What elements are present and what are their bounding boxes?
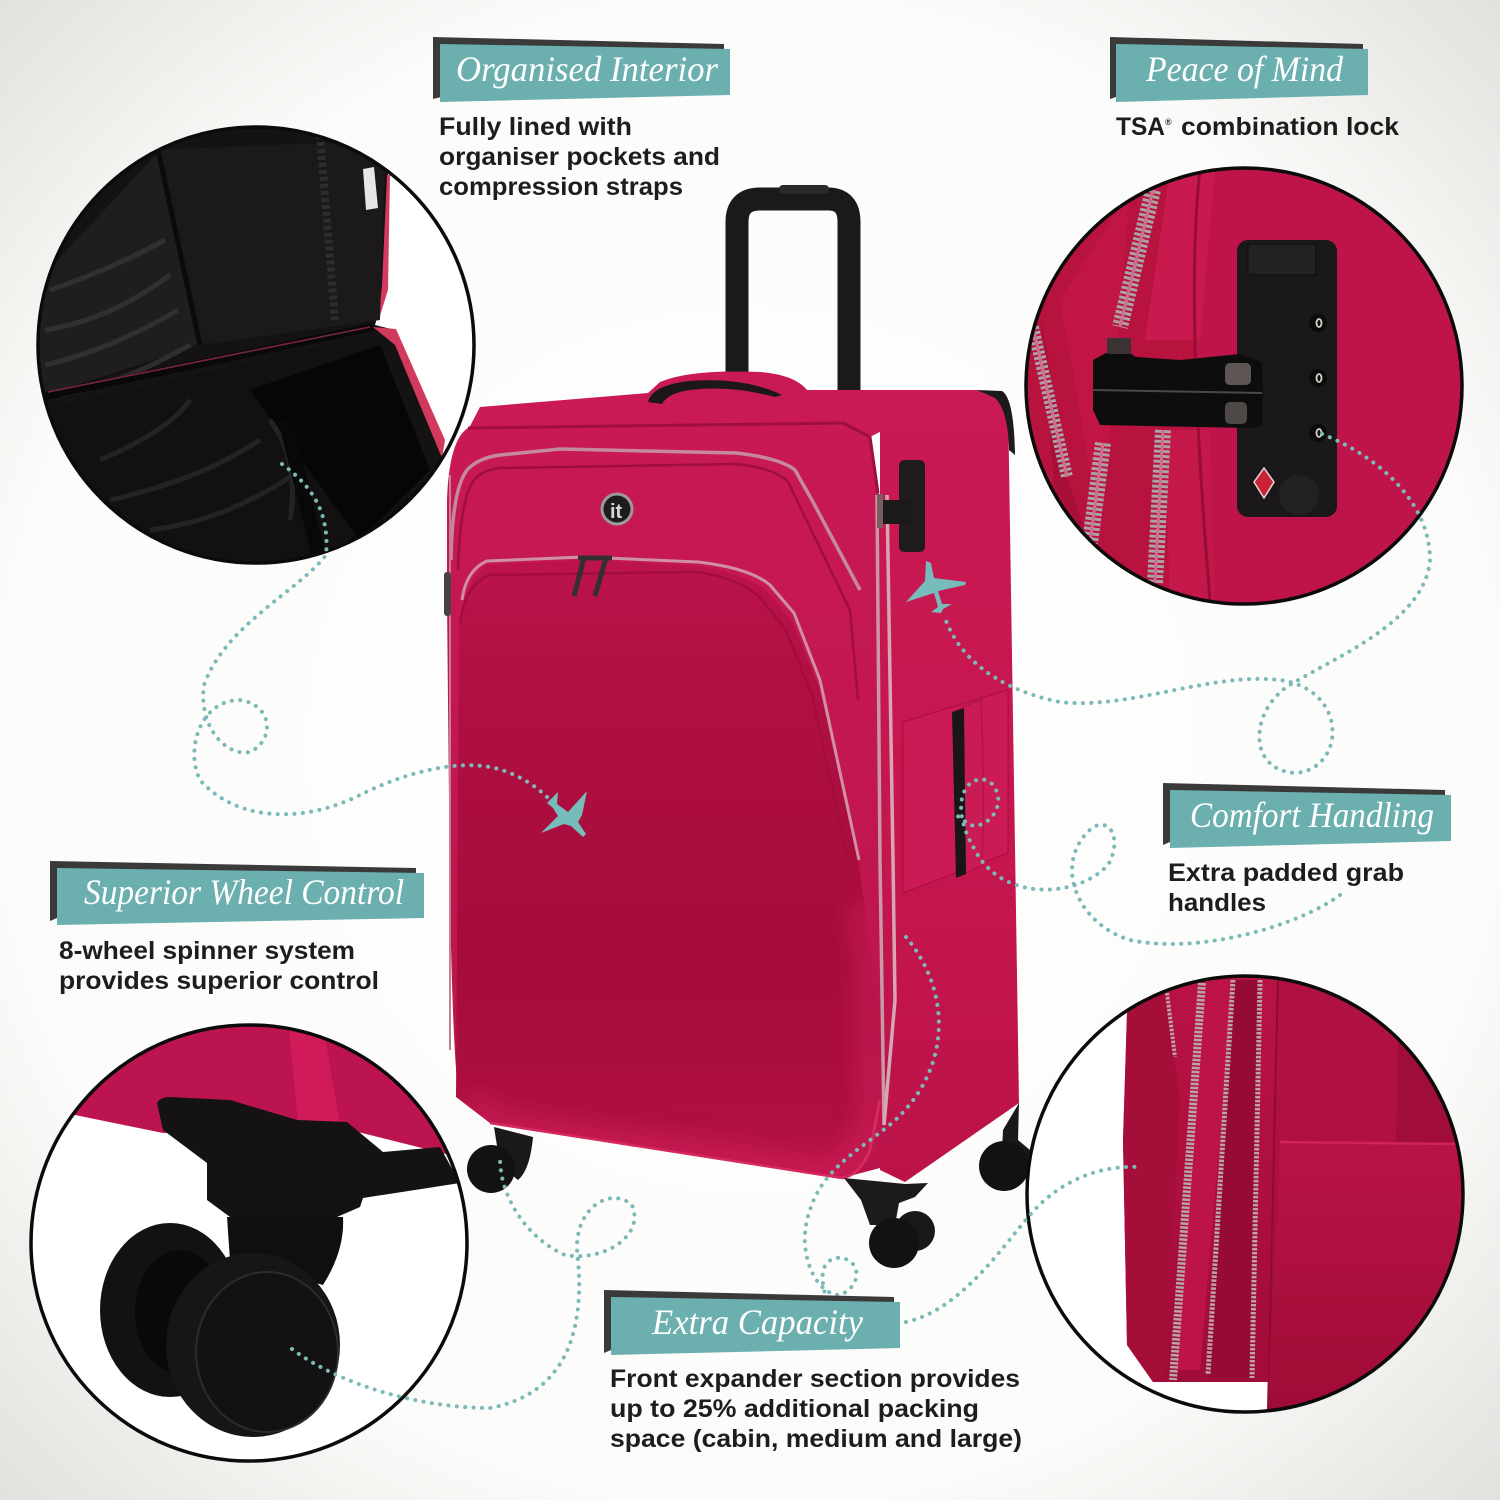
dotted flight path: interior to centre plane — [194, 464, 548, 814]
telescopic handle — [737, 185, 849, 395]
heading: Superior Wheel Control: Superior Wheel Control — [84, 872, 404, 912]
text: Superior Wheel Control: 8-wheel spinner system — [59, 937, 355, 965]
text: Organised Interior — [439, 113, 720, 201]
text: Peace of Mind: combination lock — [1181, 113, 1399, 141]
left side pullers — [444, 572, 451, 616]
dotted flight path: capacity to case — [805, 937, 939, 1295]
dotted flight path: lock to side plane — [945, 434, 1430, 773]
text: Peace of Mind: ® — [1165, 117, 1172, 127]
suitcase — [444, 185, 1030, 1268]
case fabric — [1123, 978, 1456, 1382]
logo badge: it — [610, 501, 623, 523]
suitcase front face — [447, 423, 890, 1178]
detail circle: lock — [1020, 168, 1462, 610]
main zips — [877, 495, 884, 1125]
corner bumper — [977, 390, 1015, 455]
lower lid lining — [42, 335, 420, 560]
zip pullers — [574, 558, 612, 596]
heading: Comfort Handling — [1163, 783, 1451, 848]
label tag — [363, 167, 378, 210]
dials — [1309, 314, 1327, 442]
lower panel edge glow — [470, 900, 875, 1178]
zips — [1173, 983, 1202, 1380]
zip pullers bracket — [1093, 352, 1263, 428]
text: Organised Interior: organiser pockets and — [439, 143, 720, 171]
heading: Extra Capacity: Extra Capacity — [651, 1302, 863, 1342]
fabric folds — [1028, 184, 1194, 588]
wheels — [467, 1103, 1030, 1268]
fabric — [74, 1026, 446, 1154]
heading: Comfort Handling: Comfort Handling — [1190, 795, 1434, 835]
right white cut-out — [375, 174, 472, 454]
lock body — [1237, 240, 1337, 517]
TSA mark — [1254, 468, 1274, 498]
text: Superior Wheel Control: provides superior control — [59, 967, 379, 995]
lower pocket zip — [462, 557, 859, 860]
icon: plane side — [906, 561, 966, 613]
reset button — [1248, 244, 1316, 275]
key barrel — [1279, 475, 1319, 515]
text: Organised Interior: compression straps — [439, 173, 683, 201]
mesh back panel — [376, 295, 381, 320]
text: Comfort Handling — [1168, 859, 1404, 917]
text: Organised Interior: Fully lined with — [439, 113, 632, 141]
heading: Peace of Mind: Peace of Mind — [1145, 49, 1344, 89]
logo badge — [600, 492, 634, 526]
text: Extra Capacity — [610, 1365, 1022, 1453]
rear wheel — [100, 1223, 240, 1397]
heading: Peace of Mind — [1110, 37, 1368, 102]
text: Comfort Handling: handles — [1168, 889, 1266, 917]
zip seam — [158, 150, 200, 345]
text: Superior Wheel Control — [59, 937, 379, 995]
wheel fork — [227, 1217, 343, 1285]
front wheel — [166, 1253, 340, 1437]
text: Peace of Mind: TSA — [1116, 113, 1165, 141]
heading: Organised Interior — [433, 37, 730, 102]
lower pocket panel — [456, 560, 882, 1178]
pocket — [1269, 1144, 1461, 1400]
heading: Superior Wheel Control — [50, 861, 424, 925]
upper right panel — [1280, 981, 1300, 986]
front pocket seams — [468, 423, 878, 493]
heading: Organised Interior: Organised Interior — [456, 49, 719, 89]
heading: Extra Capacity — [604, 1290, 900, 1355]
text: Comfort Handling: Extra padded grab — [1168, 859, 1404, 887]
divider with thread — [42, 327, 373, 397]
text: Extra Capacity: Front expander section provides — [610, 1365, 1020, 1393]
side grab handle strap — [952, 700, 983, 878]
upper pocket zip — [451, 449, 860, 590]
detail circle: interior — [30, 120, 480, 563]
side grab handle panel — [903, 690, 1008, 893]
detail circle: wheels — [31, 1015, 467, 1461]
text: Extra Capacity: space (cabin, medium and large) — [610, 1425, 1022, 1453]
dotted flight path: capacity — [906, 1167, 1140, 1322]
dotted flight path: wheels — [292, 1158, 634, 1408]
pink case edge — [378, 175, 390, 322]
gathered left pocket — [40, 154, 198, 392]
top carry handle grip — [648, 380, 782, 404]
wheel bracket — [157, 1097, 460, 1217]
side lock — [877, 460, 925, 552]
text: Extra Capacity: up to 25% additional packing — [610, 1395, 979, 1423]
detail circle: expander — [1027, 970, 1470, 1420]
suitcase side face — [880, 390, 1019, 1182]
icon: plane centre — [541, 791, 587, 837]
suitcase top face — [468, 371, 1004, 437]
zips — [1033, 190, 1163, 583]
dotted flight path: handle — [952, 779, 1340, 944]
